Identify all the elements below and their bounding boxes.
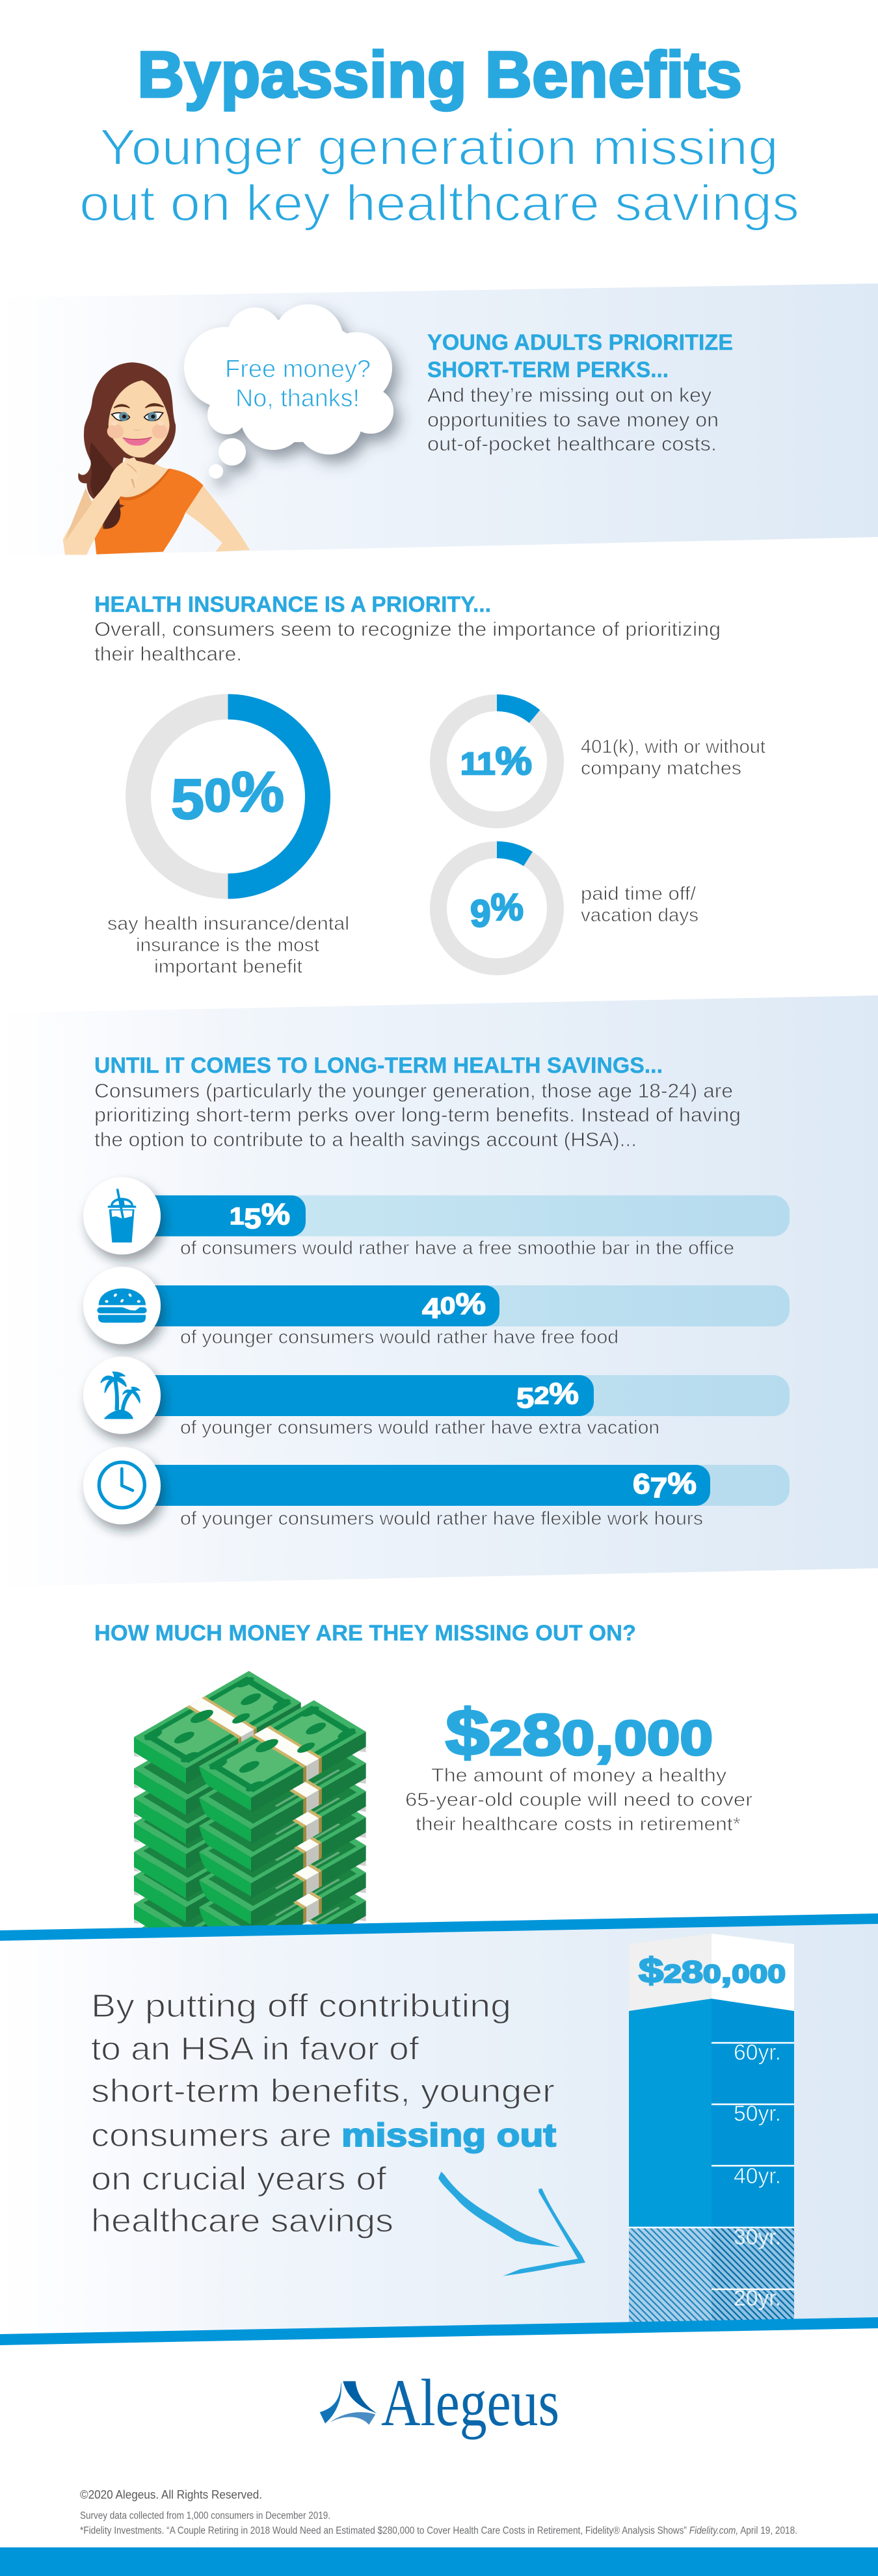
savings column chart: $280,000 — [639, 1951, 786, 1990]
bar: free food 40% — [130, 1285, 790, 1348]
bar: free food 40%: 4 — [422, 1293, 440, 1324]
cloud text — [225, 356, 371, 412]
icon: thought cloud — [184, 304, 393, 479]
donut: 9%: 9 — [470, 893, 491, 935]
bar: vacation 52% — [130, 1375, 790, 1438]
donut: 9% — [438, 850, 555, 967]
body text: out-of-pocket healthcare costs. — [427, 432, 717, 455]
subtitle: out on key healthcare savings — [79, 174, 799, 231]
icon: palm trees — [83, 1356, 161, 1434]
figure caption: their healthcare costs in retirement* — [416, 1814, 741, 1835]
heading: HOW MUCH MONEY ARE THEY MISSING OUT ON? — [94, 1621, 636, 1646]
donut: 50%: 0 — [204, 770, 232, 822]
intro text: the option to contribute to a health savings account (HSA)... — [94, 1128, 637, 1151]
label: 401(k): company matches — [581, 758, 741, 779]
statement text: short-term benefits, younger — [91, 2073, 555, 2109]
label: paid time off — [581, 884, 698, 926]
subtitle: Younger generation missing — [100, 118, 778, 176]
illustration: thinking woman — [63, 362, 250, 555]
body text — [427, 384, 719, 455]
panel: how much money — [94, 1621, 752, 1982]
donut: 50%: % — [232, 761, 284, 824]
statement text: to an HSA in favor of — [91, 2031, 419, 2067]
label: 401(k) — [581, 737, 765, 779]
bar: vacation 52%: 5 — [516, 1382, 534, 1414]
title: Bypassing Benefits — [137, 38, 742, 111]
intro text: their healthcare. — [94, 642, 242, 665]
logo: Alegeus: Alegeus — [381, 2366, 559, 2440]
figure caption — [405, 1765, 752, 1835]
divider band: lower — [0, 2317, 878, 2345]
statement text: missing out — [341, 2117, 556, 2153]
heading: SHORT-TERM PERKS... — [427, 358, 669, 382]
statement text — [91, 1988, 556, 2239]
divider band: upper — [0, 1913, 878, 1941]
bar: free food 40%: of younger consumers would rather have free food — [180, 1327, 619, 1348]
intro text — [94, 618, 721, 665]
statement text: on crucial years of — [91, 2161, 386, 2197]
heading: YOUNG ADULTS PRIORITIZE — [427, 330, 733, 355]
donut caption: insurance is the most — [136, 935, 319, 956]
savings column chart: 20yr. — [734, 2286, 781, 2311]
intro text: Consumers (particularly the younger generation, those age 18-24) are — [94, 1079, 733, 1102]
savings column chart — [629, 1934, 794, 2325]
intro text: Overall, consumers seem to recognize the importance of prioritizing — [94, 618, 721, 640]
footer: copyright: ©2020 Alegeus. All Rights Reserved. — [80, 2488, 262, 2501]
bar: flexible hours 67%: % — [667, 1466, 697, 1500]
bar: smoothie 15%: of consumers would rather have a free smoothie bar in the office — [180, 1238, 734, 1259]
donut: 11%: 11% — [460, 739, 532, 783]
bar: smoothie 15% — [130, 1195, 790, 1259]
cloud text: No, thanks! — [235, 385, 360, 412]
body text: And they’re missing out on key — [427, 384, 712, 406]
heading: UNTIL IT COMES TO LONG-TERM HEALTH SAVINGS... — [94, 1053, 663, 1078]
donut: 50%: 5 — [171, 768, 204, 831]
donut caption: important benefit — [154, 956, 302, 977]
donut: 50% — [138, 707, 317, 886]
statement text: By putting off contributing — [91, 1988, 511, 2024]
bar: flexible hours 67%: 7 — [650, 1472, 667, 1504]
footer: sources — [80, 2510, 797, 2536]
intro text: prioritizing short-term perks over long-term benefits. Instead of having — [94, 1103, 741, 1126]
figure: $280,000: $280,000 — [446, 1696, 713, 1769]
donut: 11% — [438, 703, 555, 820]
footer bar — [0, 2547, 878, 2576]
bar: flexible hours 67%: of younger consumers would rather have flexible work hours — [180, 1508, 703, 1529]
body text: opportunities to save money on — [427, 408, 719, 431]
bar: free food 40%: % — [455, 1287, 486, 1321]
donut: 9%: % — [491, 886, 524, 928]
savings column chart: 60yr. — [734, 2040, 781, 2065]
heading — [427, 330, 733, 382]
donut caption: say health insurance/dental — [107, 913, 349, 934]
subtitle — [79, 118, 799, 231]
panel: young adults — [0, 283, 878, 557]
figure caption: 65-year-old couple will need to cover — [405, 1789, 752, 1810]
donut caption — [107, 913, 349, 977]
illustration: stacks of money — [134, 1671, 366, 1982]
statement text: healthcare savings — [91, 2203, 393, 2239]
bar: flexible hours 67%: 6 — [633, 1468, 650, 1500]
bar: free food 40%: 0 — [440, 1293, 455, 1319]
bar: flexible hours 67% — [130, 1465, 790, 1529]
footer: sources: *Fidelity Investments. “A Couple Retiring in 2018 Would Need an Estimated $280,000 to Cover Health Care Costs in Retirement, Fidelity® Analysis Shows” Fidelity.com, April 19, 2018. — [80, 2525, 797, 2536]
label: paid time off: paid time off/ — [581, 884, 697, 904]
heading: HEALTH INSURANCE IS A PRIORITY... — [94, 592, 491, 617]
bar: smoothie 15%: % — [261, 1197, 290, 1231]
savings column chart: 30yr. — [734, 2225, 781, 2250]
icon: burger — [83, 1267, 161, 1345]
bar: vacation 52%: of younger consumers would rather have extra vacation — [180, 1417, 659, 1438]
panel: health insurance — [94, 592, 765, 977]
bar: vacation 52%: % — [549, 1376, 579, 1410]
label: 401(k): 401(k), with or without — [581, 737, 765, 757]
bar: smoothie 15%: 1 — [230, 1203, 244, 1229]
cloud text: Free money? — [225, 356, 371, 383]
savings column chart: 40yr. — [734, 2164, 781, 2188]
bar: vacation 52%: 2 — [534, 1382, 549, 1409]
panel: long-term health savings — [0, 995, 878, 1586]
footer: sources: Survey data collected from 1,000 consumers in December 2019. — [80, 2510, 330, 2521]
arrow — [438, 2172, 585, 2276]
label: paid time off: vacation days — [581, 905, 698, 926]
icon: clock — [83, 1447, 161, 1524]
bar: smoothie 15%: 5 — [244, 1203, 261, 1235]
figure caption: The amount of money a healthy — [431, 1765, 727, 1786]
icon: smoothie cup — [83, 1177, 161, 1255]
statement text: consumers are — [91, 2117, 332, 2153]
intro text — [94, 1079, 741, 1151]
panel: missing out — [0, 1924, 878, 2334]
savings column chart: 50yr. — [734, 2101, 781, 2126]
logo: Alegeus — [320, 2366, 559, 2440]
